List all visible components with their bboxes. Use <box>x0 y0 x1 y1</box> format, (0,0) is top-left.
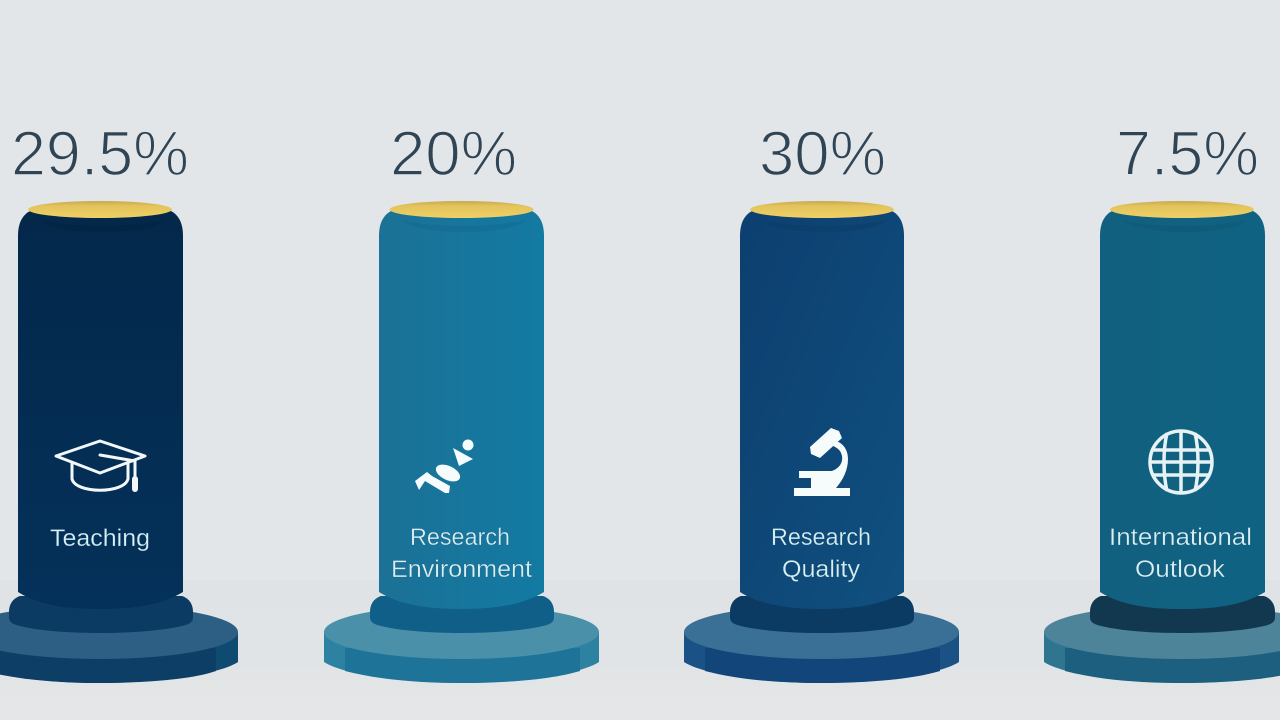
label: Research Quality <box>771 524 871 583</box>
icon: globe <box>1150 431 1212 493</box>
percentage: 29.5%: 29.5% <box>11 119 189 189</box>
floor <box>0 580 1280 720</box>
gold cap <box>1110 201 1254 218</box>
column body <box>740 210 904 609</box>
gold cap <box>28 201 172 218</box>
percentage: 7.5%: 7.5% <box>1116 119 1259 189</box>
gold cap <box>390 201 534 218</box>
shoulder shading <box>1122 220 1247 232</box>
shoulder shading <box>762 220 887 232</box>
base disc <box>684 605 959 683</box>
pillar: International Outlook <box>1044 119 1280 683</box>
label: Research Environment <box>391 524 532 583</box>
shoulder shading <box>401 220 526 232</box>
icon: graduation cap <box>56 441 145 490</box>
base disc <box>324 605 599 683</box>
label: Research Environment: Research <box>410 524 510 551</box>
label: Teaching: Teaching <box>50 525 150 552</box>
icon: microscope <box>794 428 850 496</box>
label: International Outlook: International <box>1109 524 1252 551</box>
column body <box>1100 210 1265 609</box>
collar <box>9 596 193 633</box>
column body <box>18 210 183 609</box>
icon: research tool <box>415 440 474 493</box>
label: Research Quality: Quality <box>782 556 860 583</box>
gold cap <box>750 201 894 218</box>
shoulder shading <box>40 220 165 232</box>
collar <box>1090 596 1275 633</box>
pillar: Teaching <box>0 119 238 683</box>
base disc <box>1044 605 1280 683</box>
label: International Outlook <box>1109 524 1252 583</box>
pillar: Research Quality <box>684 119 959 683</box>
percentage: 20%: 20% <box>390 119 517 189</box>
base disc <box>0 605 238 683</box>
pillar: Research Environment <box>324 119 599 683</box>
label: International Outlook: Outlook <box>1135 556 1226 583</box>
percentage: 30%: 30% <box>759 119 886 189</box>
column body <box>379 210 544 609</box>
collar <box>730 596 914 633</box>
label: Research Environment: Environment <box>391 556 532 583</box>
collar <box>370 596 554 633</box>
label: Research Quality: Research <box>771 524 871 551</box>
